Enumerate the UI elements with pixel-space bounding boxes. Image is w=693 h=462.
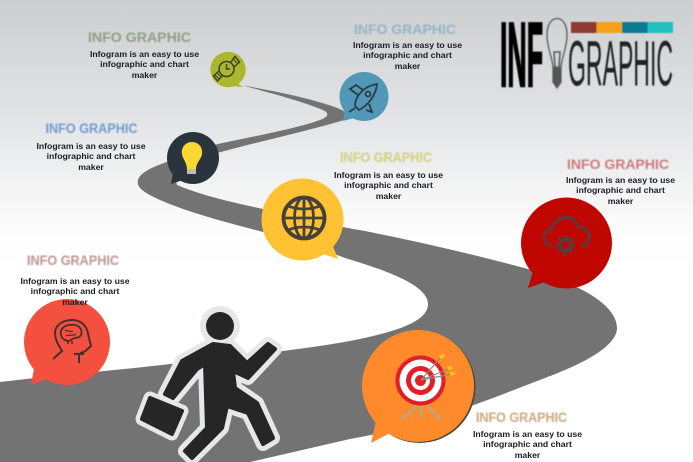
heading: INFO GRAPHIC bbox=[476, 409, 567, 425]
description: Infogram is an easy to use bbox=[566, 175, 675, 185]
logo lightbulb bbox=[547, 18, 567, 88]
callout: yellow globe bubble bbox=[262, 178, 344, 260]
heading: INFO GRAPHIC bbox=[27, 252, 119, 268]
description: infographic and chart bbox=[363, 50, 452, 60]
icon: globe bbox=[284, 198, 324, 238]
text block: globe bbox=[334, 149, 443, 201]
description: infographic and chart bbox=[576, 185, 665, 195]
icon: running businessman bbox=[142, 306, 275, 458]
callout: coral brain bubble bbox=[24, 299, 110, 385]
description: Infogram is an easy to use bbox=[36, 141, 146, 151]
text block: brain bbox=[20, 252, 130, 307]
heading: INFO GRAPHIC bbox=[340, 149, 432, 165]
description: infographic and chart bbox=[31, 286, 120, 296]
description: Infogram is an easy to use bbox=[20, 276, 130, 286]
text block: target bbox=[473, 409, 582, 460]
heading: INFO GRAPHIC bbox=[354, 21, 456, 37]
callout: red cloud bubble bbox=[521, 198, 612, 288]
text block: watch bbox=[88, 29, 199, 80]
description: infographic and chart bbox=[100, 59, 189, 69]
text block: rocket bbox=[353, 21, 462, 71]
description: Infogram is an easy to use bbox=[473, 429, 582, 439]
logo colour bar bbox=[571, 22, 673, 33]
callout: dark lightbulb bubble bbox=[167, 132, 219, 184]
heading: INFO GRAPHIC bbox=[46, 120, 138, 136]
description: infographic and chart bbox=[344, 180, 433, 190]
description: maker bbox=[78, 162, 104, 172]
icon: lightbulb bbox=[182, 142, 202, 174]
winding road bbox=[0, 86, 617, 462]
description: infographic and chart bbox=[483, 439, 572, 449]
icon: archery target bbox=[396, 355, 455, 419]
callout: olive watch bubble bbox=[210, 52, 246, 87]
logo: infographic wordmark: INF bbox=[500, 5, 543, 106]
icon: cloud with gear bbox=[544, 217, 589, 255]
description: maker bbox=[376, 191, 402, 201]
description: infographic and chart bbox=[47, 151, 136, 161]
icon: head with brain bbox=[53, 320, 91, 363]
text block: cloud bbox=[566, 156, 675, 206]
description: maker bbox=[62, 297, 88, 307]
description: Infogram is an easy to use bbox=[90, 49, 199, 59]
callout: orange target bubble bbox=[362, 330, 476, 443]
description: Infogram is an easy to use bbox=[353, 40, 462, 50]
text block: lightbulb bbox=[36, 120, 146, 172]
icon: wristwatch bbox=[214, 56, 240, 81]
description: maker bbox=[608, 196, 634, 206]
description: maker bbox=[132, 70, 158, 80]
description: Infogram is an easy to use bbox=[334, 170, 443, 180]
heading: INFO GRAPHIC bbox=[88, 29, 191, 45]
heading: INFO GRAPHIC bbox=[567, 156, 669, 172]
callout: blue rocket bubble bbox=[340, 72, 388, 121]
description: maker bbox=[395, 61, 421, 71]
icon: rocket bbox=[349, 84, 377, 112]
description: maker bbox=[515, 450, 541, 460]
